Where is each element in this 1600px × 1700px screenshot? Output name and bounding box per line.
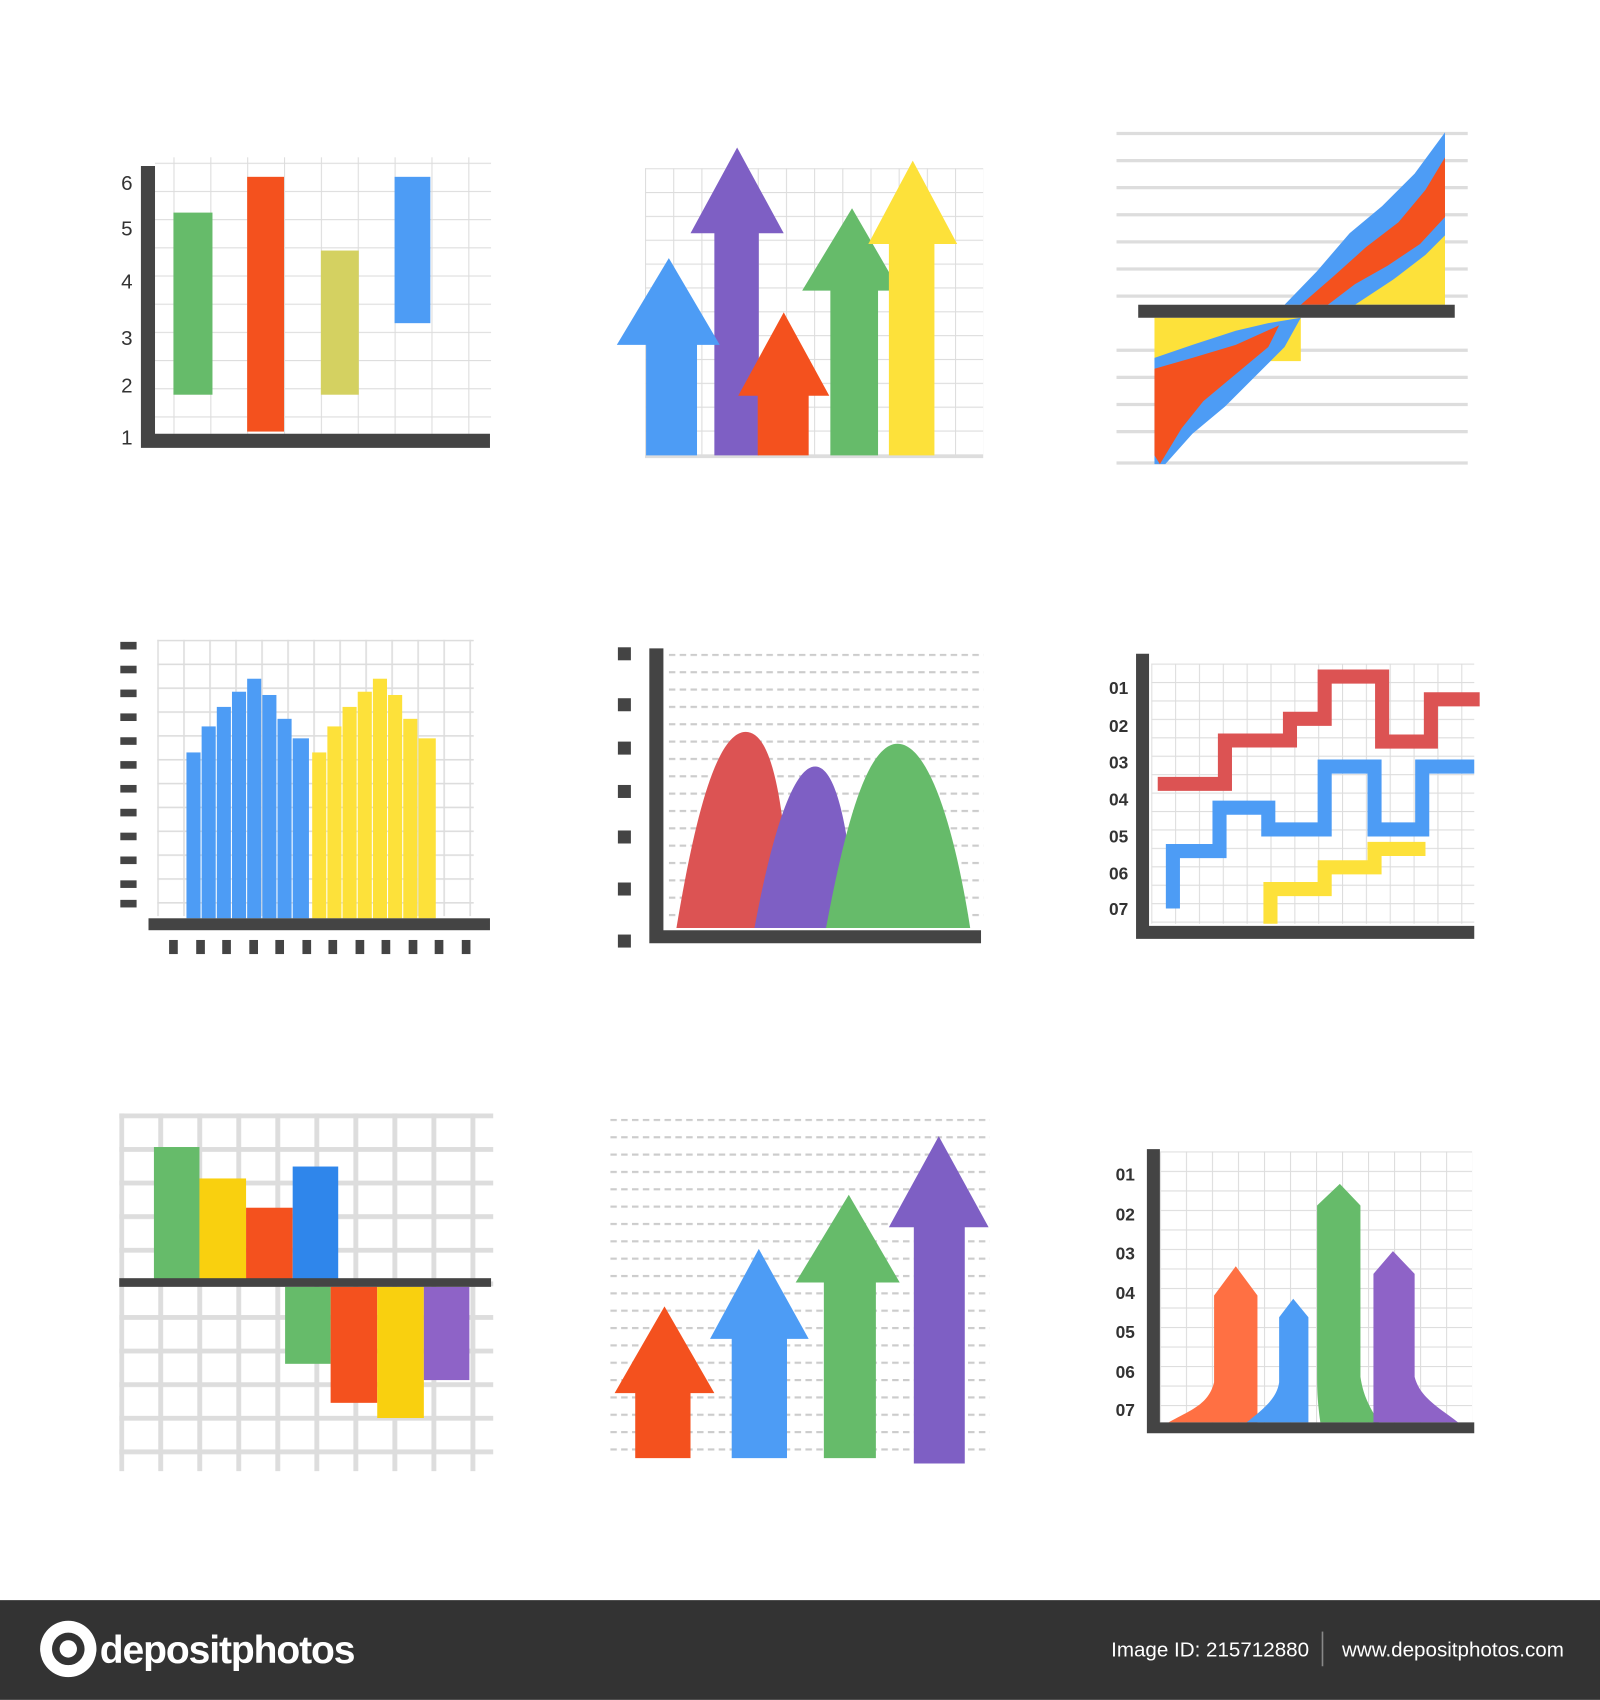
labels: 03 [1109,753,1129,773]
labels [1109,678,1129,919]
axis labels: 3 [121,327,133,350]
arrows [617,148,957,455]
bars [186,679,309,918]
labels: 07 [1109,899,1128,919]
ribbons upper [1285,132,1445,305]
ribbons lower [1154,318,1301,361]
labels [1116,1165,1135,1420]
bottom ticks [169,940,470,954]
bars [173,177,430,432]
step lines [1158,677,1480,924]
labels: 01 [1109,678,1129,698]
divider axis [1138,305,1455,318]
bars [154,1147,469,1418]
labels: 02 [1116,1205,1135,1225]
labels: 05 [1109,826,1129,846]
panel: flared arrows [1116,1149,1474,1433]
axis labels [121,172,133,450]
panel: rising arrows [610,1119,990,1464]
labels: 02 [1109,716,1128,736]
left ticks [120,642,137,907]
url: www.depositphotos.com [1341,1639,1564,1662]
axis labels: 6 [121,172,133,195]
axis [141,166,490,448]
logo icon [40,1621,96,1677]
arrows [1169,1184,1458,1422]
labels: 01 [1116,1165,1135,1185]
panel: bar chart 1 [121,157,491,450]
labels: 05 [1116,1322,1135,1342]
labels: 04 [1109,790,1129,810]
panel: step lines [1109,654,1480,939]
panel: positive negative bars [119,1113,493,1471]
labels: 04 [1116,1283,1135,1303]
labels: 06 [1109,863,1129,883]
axis labels: 4 [121,270,133,293]
panel: ribbon chart [1117,132,1468,464]
brand text: depositphotos [100,1629,355,1672]
panel: bell curves [618,647,983,948]
labels: 07 [1116,1400,1135,1420]
axis labels: 1 [121,427,133,450]
footer bar [0,1600,1600,1700]
image id: Image ID: 215712880 [1111,1639,1309,1662]
panel: histogram [120,640,490,954]
labels: 06 [1116,1362,1135,1382]
curves [676,732,791,928]
panel: arrows chart [617,148,983,457]
axis labels: 2 [121,375,133,398]
left squares [618,647,631,948]
axis labels: 5 [121,217,133,240]
labels: 03 [1116,1244,1135,1264]
